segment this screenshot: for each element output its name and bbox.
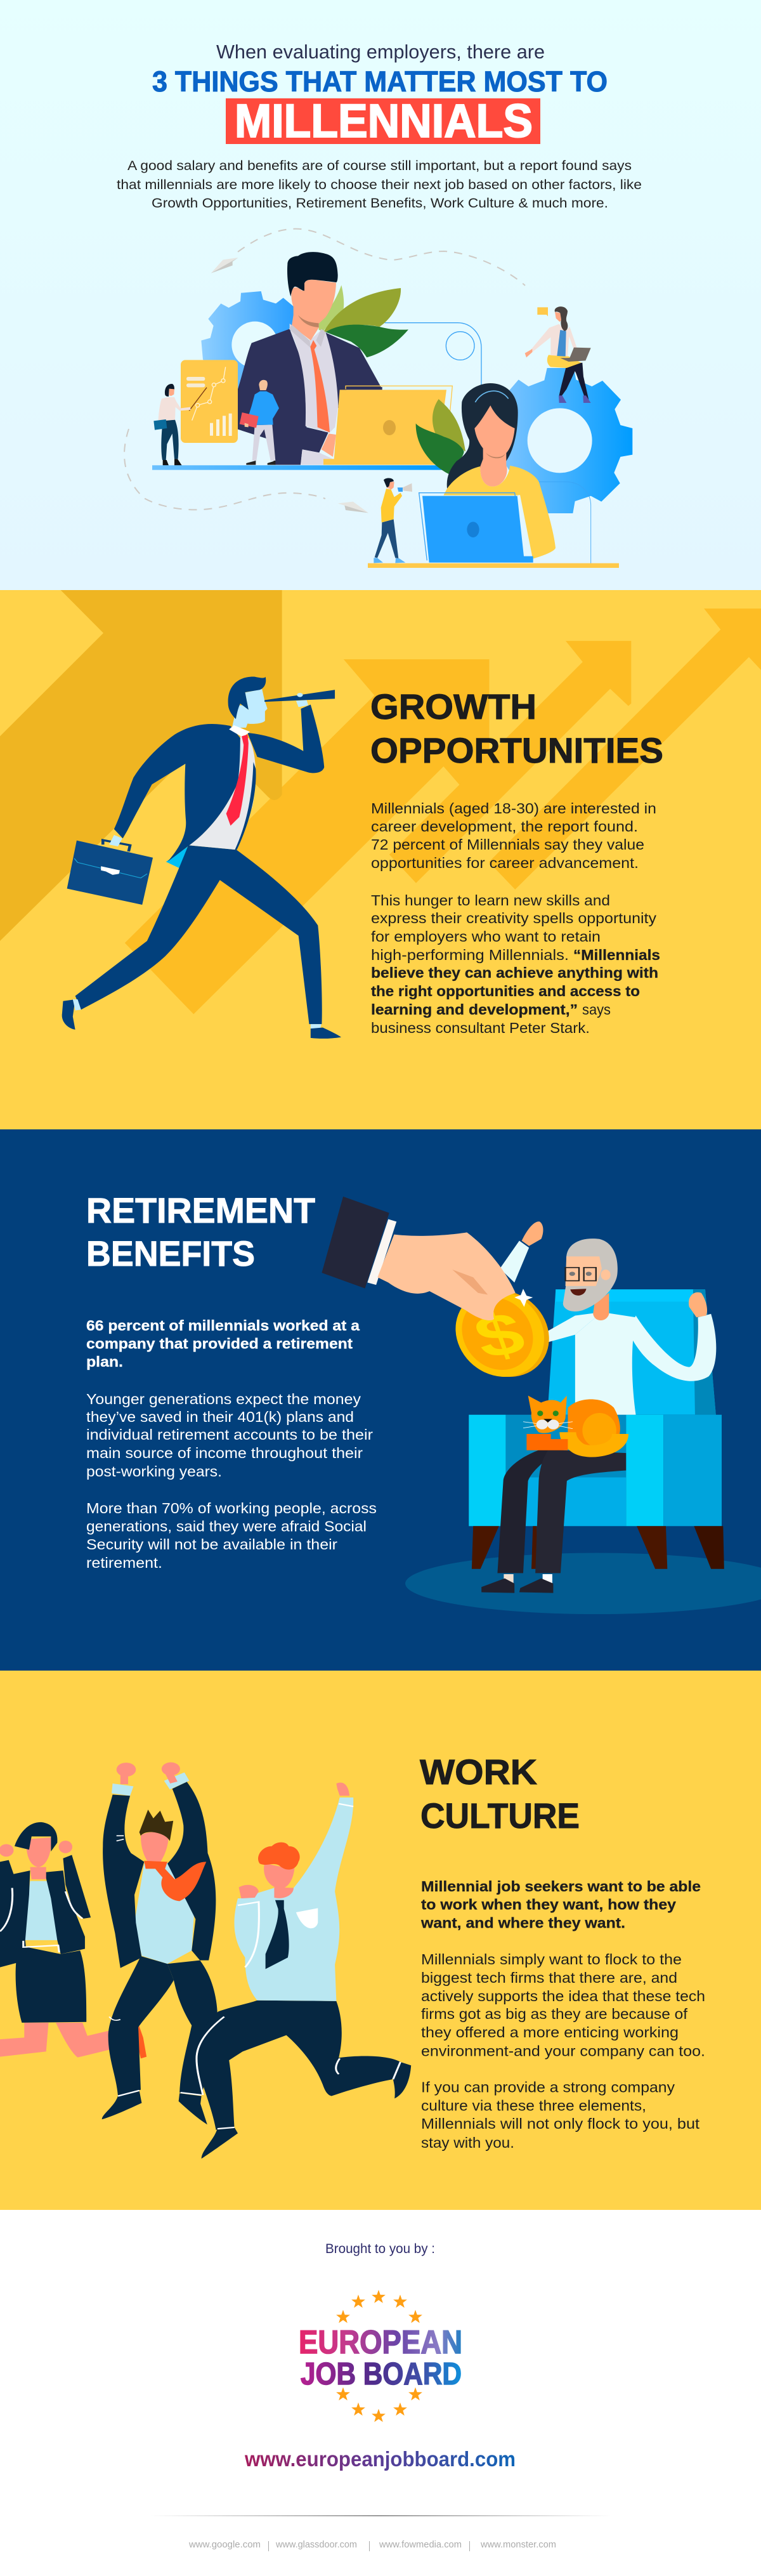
platform: blue shelf: [152, 465, 448, 470]
text block: career development: opportunities for career advancement.: [371, 855, 639, 871]
figure: man with red folder: [240, 380, 279, 465]
dashed flight paths: [124, 229, 525, 509]
logo wordmark: EUROPEAN: [299, 2324, 462, 2361]
text block: strong company culture: culture via these three elements,: [421, 2098, 646, 2114]
figure: woman at blue laptop: [443, 383, 556, 559]
platform: yellow shelf: [368, 563, 619, 568]
logo wordmark: JOB BOARD: [301, 2357, 462, 2391]
title: millennials badge: MILLENNIALS: [235, 95, 533, 147]
icon: telescope: [264, 690, 335, 707]
intro paragraph: [117, 158, 642, 211]
background arrows: [0, 590, 761, 1014]
figure: old man: [481, 1221, 716, 1593]
text block: younger generations: post-working years.: [86, 1463, 222, 1480]
logo wordmark: [299, 2324, 462, 2391]
text block: strong company culture: Millennials will not only flock to you, but: [421, 2115, 700, 2132]
text: sources: www.glassdoor.com: [275, 2539, 357, 2550]
text block: hunger to learn: for employers who want to retain: [371, 928, 601, 945]
text block: job seekers: Millennial job seekers want to be able: [421, 1878, 701, 1895]
icon: right gear: [503, 368, 632, 513]
text block: hunger to learn: “Millennials: [573, 947, 660, 963]
text block: social security: generations, said they were afraid Social: [86, 1518, 367, 1534]
figure: middle man: [102, 1763, 218, 2125]
intro paragraph: Growth Opportunities, Retirement Benefits, Work Culture & much more.: [152, 195, 608, 211]
panel: footer: [0, 2210, 761, 2576]
text block: social security: retirement.: [86, 1554, 162, 1571]
heading: work culture: [420, 1752, 580, 1836]
text: sources: www.fowmedia.com: [379, 2539, 462, 2550]
text block: strong company culture: stay with you.: [421, 2134, 514, 2151]
text block: flock to tech firms: they offered a more enticing working: [421, 2024, 679, 2040]
text block: younger generations: they’ve saved in their 401(k) plans and: [86, 1409, 354, 1425]
frame lines: [385, 323, 591, 563]
heading: growth opportunities: [370, 687, 663, 770]
figure: woman: [0, 1822, 146, 2058]
icon: plant leaves: [319, 285, 408, 357]
text block: hunger to learn: believe they can achieve anything with: [371, 964, 658, 981]
title: intro line: When evaluating employers, there are: [216, 41, 545, 63]
icon: gold coin: [446, 1285, 558, 1382]
text block: 66 percent: 66 percent of millennials worked at a: [86, 1317, 360, 1334]
panel: retirement benefits: [0, 1129, 761, 1671]
text block: hunger to learn: express their creativity spells opportunity: [371, 910, 657, 926]
figure: man with telescope and briefcase: [62, 677, 341, 1039]
panel: growth opportunities: [0, 590, 761, 1129]
icon: left gear: [201, 291, 294, 393]
icon: cat: [523, 1396, 620, 1451]
text block: strong company culture: If you can provide a strong company: [421, 2079, 675, 2095]
icon: ring of stars: [336, 2290, 422, 2422]
heading: growth opportunities: GROWTH: [370, 687, 537, 726]
text block: job seekers: [420, 1878, 701, 1931]
text block: hunger to learn: says: [582, 1001, 611, 1018]
text block: flock to tech firms: actively supports the idea that these tech: [421, 1988, 705, 2004]
floor shadow: [405, 1553, 761, 1614]
icon: giving hand with cuff: [322, 1197, 516, 1320]
text block: hunger to learn: the right opportunities and access to: [371, 983, 640, 999]
heading: retirement benefits: [86, 1190, 315, 1273]
icon: top paper plane: [211, 258, 238, 273]
text block: 66 percent: company that provided a retirement: [86, 1335, 353, 1351]
text block: hunger to learn: business consultant Peter Stark.: [371, 1020, 590, 1036]
illustration: retiree in armchair receiving coin: [322, 1197, 761, 1614]
text block: social security: Security will not be available in their: [86, 1536, 337, 1553]
figure: man with megaphone: [374, 478, 412, 563]
figure: businessman: [238, 252, 382, 465]
panel: work culture: [0, 1671, 761, 2210]
text block: younger generations: Younger generations expect the money: [86, 1391, 361, 1407]
illustration: right scene with laptop woman: [368, 306, 632, 568]
text block: younger generations: [86, 1391, 373, 1480]
text: sources: www.google.com: [188, 2539, 261, 2550]
illustration: left scene with businessman: [152, 252, 452, 513]
title: main heading: 3 THINGS THAT MATTER MOST TO: [152, 65, 608, 98]
icon: front leaves: [416, 399, 465, 474]
text block: younger generations: individual retirement accounts to be their: [86, 1426, 373, 1443]
text block: hunger to learn: This hunger to learn new skills and: [371, 892, 610, 909]
icon: gold coin: $: [466, 1299, 533, 1371]
heading: work culture: CULTURE: [420, 1796, 580, 1836]
text block: strong company culture: [421, 2079, 700, 2151]
text block: flock to tech firms: firms got as big as they are because of: [421, 2006, 688, 2022]
text block: hunger to learn: learning and development,”: [371, 1001, 578, 1018]
logo: european job board: [299, 2290, 462, 2422]
icon: bottom paper plane: [338, 502, 368, 513]
heading: retirement benefits: RETIREMENT: [86, 1190, 315, 1230]
icon: chart board: [181, 360, 238, 443]
heading: work culture: WORK: [420, 1752, 537, 1792]
text: sources: [188, 2539, 556, 2551]
laptop: yellow: [323, 386, 452, 465]
intro paragraph: A good salary and benefits are of course still important, but a report found says: [127, 158, 632, 173]
laptop: blue: [419, 493, 533, 563]
text block: social security: [86, 1500, 377, 1571]
text block: flock to tech firms: Millennials simply want to flock to the: [421, 1951, 682, 1968]
text: website url: www.europeanjobboard.com: [244, 2447, 516, 2471]
panel: header: [0, 0, 761, 590]
intro paragraph: that millennials are more likely to choose their next job based on other factors, like: [117, 177, 642, 192]
figure: woman sitting on gear: [525, 306, 591, 403]
heading: retirement benefits: BENEFITS: [86, 1233, 255, 1273]
text block: career development: [371, 800, 656, 871]
text block: job seekers: want, and where they want.: [420, 1915, 625, 1931]
heading: growth opportunities: OPPORTUNITIES: [370, 730, 663, 770]
text block: younger generations: main source of income throughout their: [86, 1445, 363, 1461]
armchair: [469, 1289, 724, 1569]
text: brought to you by: Brought to you by :: [325, 2242, 435, 2256]
text block: job seekers: to work when they want, how they: [421, 1896, 676, 1912]
text block: social security: More than 70% of working people, across: [86, 1500, 377, 1516]
text block: career development: career development, the report found.: [371, 818, 638, 835]
text: sources: www.monster.com: [480, 2539, 556, 2550]
text block: 66 percent: [86, 1317, 360, 1370]
text block: 66 percent: plan.: [86, 1353, 123, 1370]
text block: career development: 72 percent of Millennials say they value: [371, 836, 644, 853]
text block: hunger to learn: [371, 892, 660, 1036]
figure: right man: [197, 1782, 411, 2159]
text block: flock to tech firms: environment-and your company can too.: [421, 2043, 705, 2060]
text block: flock to tech firms: biggest tech firms that there are, and: [421, 1969, 677, 1986]
text block: career development: Millennials (aged 18-30) are interested in: [371, 800, 656, 817]
figure: presenter woman: [153, 384, 191, 465]
text block: hunger to learn: high-performing Millennials.: [371, 947, 569, 963]
icon: briefcase: [67, 835, 153, 905]
text block: flock to tech firms: [421, 1951, 705, 2060]
illustration: three jumping colleagues: [0, 1763, 411, 2159]
